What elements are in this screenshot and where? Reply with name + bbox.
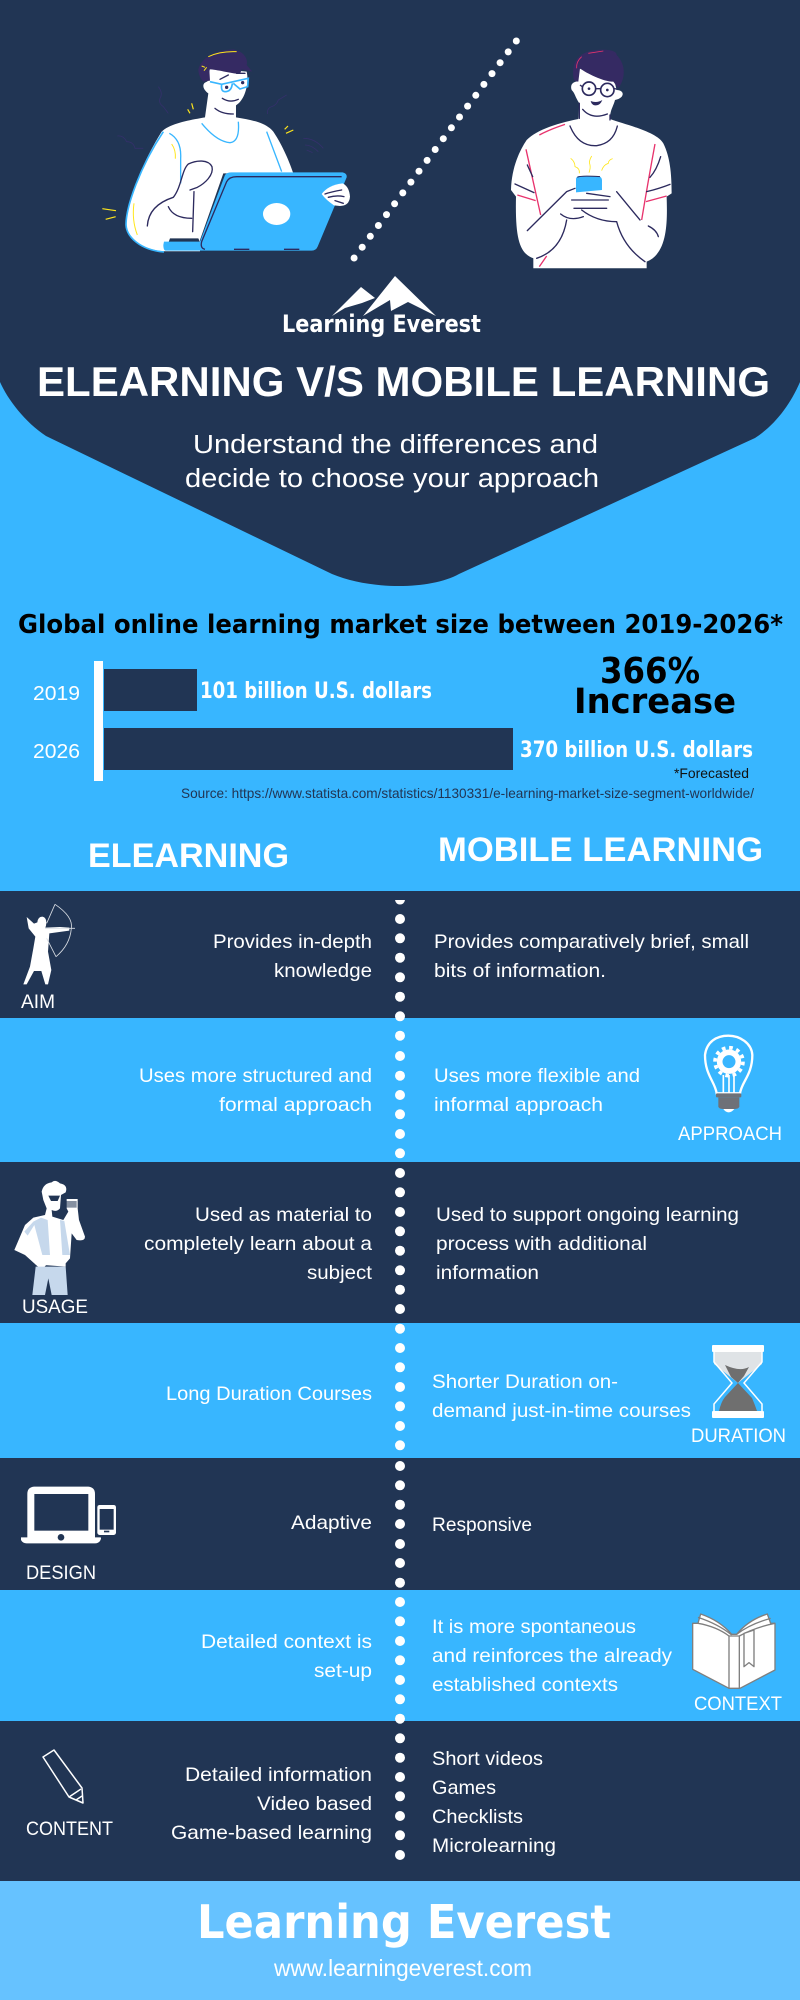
dotted diagonal divider [351,38,520,262]
text: mobile content: Checklists [432,1806,523,1828]
text: eLearning content: Game-based learning [171,1822,372,1844]
subtitle: decide to choose your approach [185,465,599,493]
bar chart: 101 billion U.S. dollars [200,679,432,704]
text: mobile duration: demand just-in-time courses [432,1400,691,1422]
bar chart: 2026 [33,740,80,763]
text: mobile content: Short videos [432,1748,543,1770]
text: eLearning usage: completely learn about a [144,1233,372,1255]
title: ELEARNING V/S MOBILE LEARNING [37,358,770,405]
text: mobile context [432,1616,672,1696]
text: mobile aim [434,931,749,982]
label: content: CONTENT [26,1818,113,1840]
footer url: www.learningeverest.com [273,1955,532,1981]
panel: content [0,1721,800,1881]
text: mobile usage: information [436,1262,539,1284]
text: mobile duration [432,1371,691,1422]
panel: approach [139,1036,782,1145]
text: mobile approach [434,1065,640,1116]
text: mobile usage: Used to support ongoing learning [436,1204,739,1226]
label: context: CONTEXT [694,1693,782,1715]
panel: footer [0,1881,800,2000]
text: eLearning design: Adaptive [291,1512,372,1534]
text: eLearning approach: formal approach [219,1094,372,1116]
text: mobile content: Games [432,1777,496,1799]
text: mobile context: It is more spontaneous [432,1616,636,1638]
text: eLearning context: set-up [314,1660,372,1682]
text: eLearning usage: Used as material to [195,1204,372,1226]
panel: duration [166,1345,786,1447]
illustration: man with laptop [102,49,350,252]
text: eLearning usage: subject [307,1262,373,1284]
panel: market size chart [18,610,783,801]
logo: Learning Everest [282,276,481,338]
panel: design [0,1458,800,1590]
text: eLearning usage [144,1204,373,1284]
text: mobile duration: Shorter Duration on- [432,1371,618,1393]
text: eLearning content [171,1764,372,1844]
label: usage: USAGE [22,1296,88,1318]
text: mobile content: Microlearning [432,1835,556,1857]
callout: 366% increase [574,651,736,722]
heading: eLearning: ELEARNING [88,837,289,875]
text: eLearning approach: Uses more structured and [139,1065,372,1087]
icon: light bulb with gear [705,1036,752,1112]
icon: pencil [43,1750,83,1803]
text: eLearning aim: Provides in-depth [213,931,372,953]
text: mobile approach: Uses more flexible and [434,1065,640,1087]
forecast note: *Forecasted [674,765,749,781]
text: eLearning content: Detailed information [185,1764,372,1786]
bar chart: 2019 [33,682,80,705]
text: mobile design: Responsive [432,1514,532,1536]
label: approach: APPROACH [678,1123,782,1145]
label: aim: AIM [21,991,55,1013]
label: duration: DURATION [691,1425,786,1447]
callout: 366% increase: Increase [574,682,736,722]
bar chart: 370 billion U.S. dollars [520,738,753,763]
text: mobile approach: informal approach [434,1094,603,1116]
text: eLearning context [201,1631,372,1682]
callout: 366% increase: 366% [600,651,700,692]
label: design: DESIGN [26,1562,96,1584]
icon: open book [693,1614,775,1688]
text: mobile aim: bits of information. [434,960,606,982]
panel: header [0,0,800,586]
text: eLearning context: Detailed context is [201,1631,372,1653]
illustration: man with phone [511,50,672,268]
text: mobile context: and reinforces the already [432,1645,672,1667]
panel: aim [0,891,800,1018]
text: eLearning aim: knowledge [274,960,372,982]
icon: laptop and phone [21,1487,116,1543]
footer brand: Learning Everest [197,1895,611,1949]
icon: archer [23,904,75,984]
panel: usage [0,1162,800,1323]
text: mobile context: established contexts [432,1674,618,1696]
source: Source: https://www.statista.com/statistics/1130331/e-learning-market-size-segment-worldwide/ [181,785,754,801]
panel: context [201,1614,782,1715]
text: eLearning aim [213,931,372,982]
subtitle: Understand the differences and [193,431,598,459]
text: eLearning duration: Long Duration Courses [166,1383,372,1405]
heading: mobile learning: MOBILE LEARNING [438,831,763,869]
dotted center divider [395,900,405,1860]
text: mobile content [432,1748,556,1857]
text: eLearning approach [139,1065,372,1116]
bar chart [33,661,753,781]
text: mobile usage: process with additional [436,1233,647,1255]
text: mobile usage [436,1204,739,1284]
text: eLearning content: Video based [257,1793,372,1815]
logo: Learning Everest: Learning Everest [282,310,481,338]
icon: hourglass [712,1345,764,1418]
text: mobile aim: Provides comparatively brief, small [434,931,749,953]
icon: person with binoculars [14,1181,85,1295]
subtitle [185,431,599,493]
